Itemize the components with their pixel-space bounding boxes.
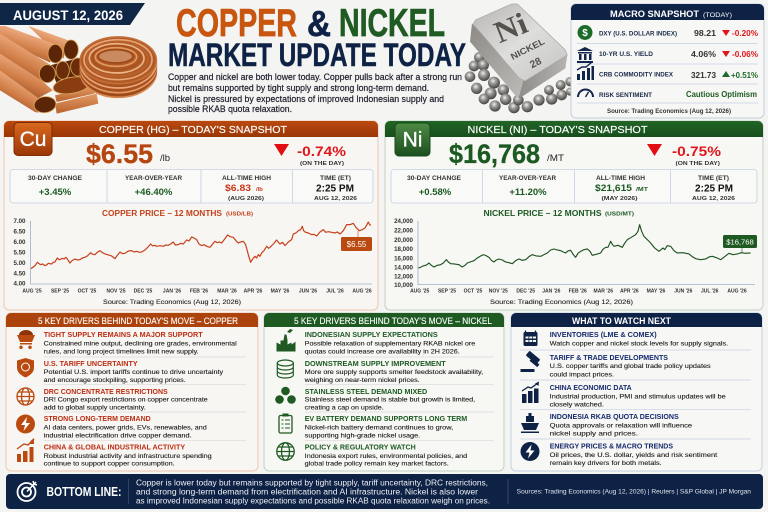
row: DXY: -0.20% bbox=[732, 29, 758, 38]
copper chart: 4.00 bbox=[13, 281, 26, 288]
driver: tariff uncertainty: and encourage stockpiling, supporting prices. bbox=[44, 377, 186, 384]
copper daily change bbox=[274, 143, 347, 167]
nickel chart: SEP '25 bbox=[438, 288, 456, 294]
driver: downstream supply: More ore supply supports smelter feedstock availability, bbox=[305, 369, 483, 376]
nickel chart: APR '26 bbox=[620, 288, 639, 294]
sources: Sources: Trading Economics (Aug 12, 2026) | Reuters | S&P Global | JP Morgan bbox=[517, 488, 752, 496]
driver: long-term demand: industrial electrification drive copper demand. bbox=[44, 432, 192, 440]
watch: RKAB quota bbox=[521, 412, 692, 438]
nickel chart: NOV '25 bbox=[489, 288, 508, 294]
copper chart: JUL '26 bbox=[326, 288, 344, 294]
copper chart: (USD/LB) bbox=[226, 212, 253, 218]
nickel chart: AUG '25 bbox=[410, 288, 430, 294]
nickel drivers header bbox=[264, 313, 504, 327]
title: NICKEL bbox=[339, 2, 445, 45]
watch: tariff bbox=[520, 351, 711, 378]
driver: Indonesian supply bbox=[276, 329, 476, 356]
nickel chart: 20,000 bbox=[394, 237, 414, 244]
nickel chart: JAN '26 bbox=[542, 288, 561, 294]
nickel price: /MT bbox=[547, 153, 564, 164]
copper stats: +3.45% bbox=[39, 187, 72, 198]
nickel badge bbox=[395, 123, 430, 156]
date banner: AUGUST 12, 2026 bbox=[13, 8, 123, 23]
driver: downstream supply: DOWNSTREAM SUPPLY IMPROVEMENT bbox=[305, 359, 446, 368]
nickel chart: 18,000 bbox=[394, 246, 414, 253]
row: 10-yr yield: 10-YR U.S. YIELD bbox=[599, 51, 654, 58]
driver: Indonesian supply: quotas could increase ore availability in 2H 2026. bbox=[305, 348, 460, 356]
driver: policy watch bbox=[277, 442, 468, 468]
row: DXY: DXY (U.S. DOLLAR INDEX) bbox=[599, 30, 677, 38]
watch: China data: Industrial production, PMI and stimulus updates will be bbox=[550, 394, 726, 400]
nickel daily change: (ON THE DAY) bbox=[676, 161, 720, 167]
illustration: nickel ingot and pellets: 28 bbox=[528, 56, 544, 71]
intro paragraph: Nickel is pressured by expectations of improved Indonesian supply and bbox=[168, 93, 444, 104]
intro paragraph bbox=[168, 71, 462, 114]
copper daily change: (ON THE DAY) bbox=[300, 161, 344, 167]
bottom line text: Copper is lower today but remains supported by tight supply, tariff uncertainty, DRC restrictions, bbox=[136, 478, 488, 488]
copper daily change: -0.74% bbox=[297, 143, 347, 159]
watch: tariff: could impact prices. bbox=[550, 372, 614, 378]
copper chart: JAN '26 bbox=[163, 288, 181, 294]
driver: Indonesian supply: Possible relaxation of supplementary RKAB nickel ore bbox=[305, 340, 476, 348]
nickel stats bbox=[391, 170, 757, 203]
nickel stats: TIME (ET) bbox=[698, 175, 729, 182]
nickel stats: /MT bbox=[636, 187, 649, 193]
copper stats: AUG 12, 2026 bbox=[314, 196, 357, 202]
illustration: nickel ingot and pellets bbox=[465, 4, 575, 113]
copper chart: APR '26 bbox=[244, 288, 263, 294]
copper stats: 2:25 PM bbox=[316, 184, 354, 194]
driver: China & global activity: continue to support copper consumption. bbox=[44, 460, 175, 468]
copper header: COPPER (HG) – TODAY'S SNAPSHOT bbox=[99, 125, 287, 136]
row: DXY bbox=[578, 25, 758, 40]
title bbox=[168, 2, 466, 73]
illustration: nickel ingot and pellets: NICKEL bbox=[509, 36, 547, 62]
driver: China & global activity bbox=[17, 438, 212, 468]
nickel stats: (MAY 2026) bbox=[602, 196, 638, 202]
watch: China data bbox=[522, 382, 726, 408]
driver: long-term demand: AI data centers, power grids, EVs, renewables, and bbox=[44, 424, 207, 432]
nickel badge: Ni bbox=[403, 128, 422, 152]
driver: EV battery bbox=[279, 414, 467, 440]
nickel chart: 24,000 bbox=[394, 218, 414, 225]
nickel chart: FEB '26 bbox=[569, 288, 587, 294]
bottom line text: as improved Indonesian supply expectations and possible RKAB quota relaxation weigh on prices. bbox=[136, 496, 490, 506]
bottom line label: BOTTOM LINE: bbox=[46, 485, 122, 499]
copper stats: ALL-TIME HIGH bbox=[222, 175, 271, 182]
copper chart: COPPER PRICE – 12 MONTHS bbox=[102, 208, 222, 218]
copper chart: JUN '26 bbox=[299, 288, 317, 294]
copper chart: OCT '25 bbox=[78, 288, 97, 294]
nickel chart bbox=[394, 208, 757, 294]
row: CRB: +0.51% bbox=[731, 71, 758, 80]
copper chart: AUG '25 bbox=[22, 288, 42, 294]
copper chart: FEB '26 bbox=[190, 288, 208, 294]
copper stats: +46.40% bbox=[135, 187, 173, 198]
driver: downstream supply: weighing on near-term nickel prices. bbox=[304, 377, 420, 384]
copper price tag bbox=[341, 231, 372, 251]
nickel chart: NICKEL PRICE – 12 MONTHS bbox=[484, 208, 602, 218]
intro paragraph: but remains supported by tight supply and strong long-term demand. bbox=[168, 82, 429, 93]
nickel stats: $21,615 bbox=[595, 183, 633, 194]
intro paragraph: possible RKAB quota relaxation. bbox=[168, 103, 292, 114]
nickel chart: OCT '25 bbox=[464, 288, 483, 294]
nickel chart: 10,000 bbox=[394, 282, 414, 289]
copper source: Source: Trading Economics (Aug 12, 2026) bbox=[103, 299, 241, 306]
illustration: nickel ingot and pellets: Ni bbox=[489, 6, 533, 50]
row: DXY: 98.21 bbox=[694, 28, 716, 38]
nickel price tag bbox=[723, 235, 757, 253]
watch: inventories bbox=[524, 330, 728, 348]
driver: stainless steel bbox=[275, 387, 475, 412]
watch: RKAB quota: INDONESIA RKAB QUOTA DECISIONS bbox=[550, 412, 679, 421]
row: CRB: CRB COMMODITY INDEX bbox=[599, 72, 674, 78]
copper price: /lb bbox=[160, 153, 170, 164]
copper chart: MAR '26 bbox=[217, 288, 237, 294]
macro header: (TODAY) bbox=[703, 12, 732, 19]
copper badge: Cu bbox=[20, 128, 46, 151]
row: CRB bbox=[577, 62, 758, 80]
icon: target bbox=[18, 481, 37, 501]
date banner bbox=[0, 3, 145, 25]
copper price line bbox=[31, 222, 371, 269]
driver: DRC restrictions: add to global supply uncertainty. bbox=[44, 404, 146, 412]
driver: DRC restrictions bbox=[17, 387, 208, 412]
watch: tariff: U.S. copper tariffs and global trade policy updates bbox=[550, 363, 711, 370]
driver: DRC restrictions: DRC CONCENTRATE RESTRICTIONS bbox=[44, 387, 168, 396]
nickel chart: 14,000 bbox=[394, 264, 414, 271]
nickel price tag: $16,768 bbox=[726, 238, 754, 246]
nickel chart: AUG '26 bbox=[727, 288, 747, 294]
copper chart: 5.50 bbox=[13, 250, 26, 257]
row: DXY: $ bbox=[582, 28, 588, 39]
driver: tight supply: rules, and long project timelines limit new supply. bbox=[44, 348, 199, 356]
nickel chart: (USD/MT) bbox=[605, 212, 634, 218]
copper chart: 4.50 bbox=[13, 271, 26, 278]
nickel stats: 30-DAY CHANGE bbox=[407, 175, 462, 182]
copper stats bbox=[10, 170, 373, 203]
driver: tight supply: TIGHT SUPPLY REMAINS A MAJOR SUPPORT bbox=[44, 330, 203, 339]
driver: downstream supply bbox=[277, 359, 483, 384]
watch: energy prices: Oil prices, the U.S. dollar, yields and risk sentiment bbox=[550, 452, 717, 459]
copper chart: NOV '25 bbox=[107, 288, 126, 294]
panel: macro snapshot bbox=[571, 4, 764, 118]
macro header bbox=[571, 4, 764, 20]
driver: Indonesian supply: INDONESIAN SUPPLY EXPECTATIONS bbox=[305, 330, 438, 339]
driver: DRC restrictions: DR! Congo export restrictions on copper concentrate bbox=[44, 396, 208, 404]
nickel price line bbox=[418, 225, 751, 268]
copper chart: 7.00 bbox=[13, 218, 26, 225]
row: CRB: 321.73 bbox=[691, 70, 716, 80]
copper drivers header bbox=[6, 313, 258, 327]
copper price: $6.55 bbox=[86, 139, 153, 169]
bottom line bar bbox=[6, 474, 763, 509]
watch: energy prices: remain key drivers for both metals. bbox=[550, 460, 662, 467]
driver: long-term demand bbox=[16, 414, 207, 440]
watch: China data: CHINA ECONOMIC DATA bbox=[550, 383, 632, 392]
row: risk sentiment bbox=[578, 90, 757, 99]
macro header: MACRO SNAPSHOT bbox=[610, 9, 699, 20]
driver: stainless steel: STAINLESS STEEL DEMAND MIXED bbox=[305, 387, 428, 396]
nickel chart: 12,000 bbox=[394, 274, 414, 280]
panel: nickel drivers bbox=[264, 313, 504, 471]
nickel chart: MAY '26 bbox=[647, 288, 666, 294]
nickel stats: +0.58% bbox=[419, 187, 452, 198]
driver: tight supply: Constrained mine output, declining ore grades, environmental bbox=[44, 340, 237, 348]
copper stats: TIME (ET) bbox=[320, 175, 351, 182]
copper price tag: $6.55 bbox=[347, 240, 367, 249]
bottom line text: and strong long-term demand from electrification and AI infrastructure. Nickel is also lower bbox=[136, 488, 478, 496]
copper badge bbox=[14, 122, 52, 156]
copper chart: MAY '26 bbox=[271, 288, 290, 294]
copper stats: (AUG 2026) bbox=[228, 196, 264, 202]
panel: nickel snapshot bbox=[385, 121, 763, 310]
nickel drivers header: 5 KEY DRIVERS BEHIND TODAY'S MOVE – NICKEL bbox=[294, 316, 492, 326]
title: MARKET UPDATE TODAY bbox=[168, 37, 466, 73]
row: 10-yr yield: 4.06% bbox=[691, 49, 717, 59]
panel: copper snapshot bbox=[4, 121, 378, 310]
illustration: copper pipes and coil bbox=[0, 26, 157, 114]
bottom line text bbox=[136, 478, 490, 506]
row: 10-yr yield: -0.06% bbox=[732, 50, 758, 59]
nickel chart: JUN '26 bbox=[674, 288, 693, 294]
copper drivers header: 5 KEY DRIVERS BEHIND TODAY'S MOVE – COPPER bbox=[38, 316, 238, 326]
driver: policy watch: Indonesia export rules, environmental policies, and bbox=[305, 453, 468, 460]
nickel daily change bbox=[647, 143, 722, 167]
nickel stats: YEAR-OVER-YEAR bbox=[499, 175, 556, 182]
title: & bbox=[307, 3, 331, 44]
nickel chart: 22,000 bbox=[394, 228, 414, 235]
driver: tight supply bbox=[17, 330, 237, 356]
watch header: WHAT TO WATCH NEXT bbox=[572, 316, 671, 326]
macro source: Source: Trading Economics (Aug 12, 2026) bbox=[607, 108, 731, 115]
copper stats: $6.83 bbox=[225, 183, 251, 194]
watch: energy prices: ENERGY PRICES & MACRO TRENDS bbox=[550, 442, 673, 450]
driver: tariff uncertainty: Potential U.S. import tariffs continue to drive uncertainty bbox=[44, 369, 224, 376]
driver: tariff uncertainty: U.S. TARIFF UNCERTAINTY bbox=[44, 359, 138, 368]
nickel price: $16,768 bbox=[449, 139, 540, 169]
copper stats: YEAR-OVER-YEAR bbox=[125, 175, 182, 182]
copper chart: SEP '25 bbox=[51, 288, 69, 294]
nickel chart: DEC '25 bbox=[516, 288, 535, 294]
driver: EV battery: supporting high-grade nickel usage. bbox=[305, 432, 420, 440]
nickel source: Source: Trading Economics (Aug 12, 2026) bbox=[490, 299, 633, 306]
title: COPPER bbox=[176, 2, 297, 45]
copper chart bbox=[13, 208, 372, 294]
driver: long-term demand: STRONG LONG-TERM DEMAND bbox=[44, 414, 151, 423]
copper chart: 6.50 bbox=[13, 229, 26, 236]
row: 10-yr yield bbox=[577, 47, 758, 63]
copper header bbox=[4, 121, 378, 137]
driver: policy watch: global trade policy remain key market factors. bbox=[305, 460, 449, 468]
nickel header: NICKEL (NI) – TODAY'S SNAPSHOT bbox=[468, 125, 648, 136]
watch: RKAB quota: Quota approvals or relaxation will influence bbox=[550, 422, 692, 430]
panel: what to watch next bbox=[511, 313, 762, 471]
watch: RKAB quota: nickel supply and prices. bbox=[550, 430, 638, 438]
copper chart: 6.00 bbox=[13, 239, 26, 246]
copper chart: DEC '25 bbox=[134, 288, 153, 294]
driver: China & global activity: Robust industrial activity and infrastructure spending bbox=[44, 453, 212, 460]
watch header bbox=[511, 313, 762, 327]
copper chart: AUG '26 bbox=[352, 288, 372, 294]
row: risk sentiment: Cautious Optimism bbox=[686, 90, 757, 99]
nickel stats: 2:25 PM bbox=[695, 184, 733, 194]
panel: copper drivers bbox=[6, 313, 258, 471]
copper stats: 30-DAY CHANGE bbox=[28, 175, 83, 182]
driver: stainless steel: Stainless steel demand is stable but growth is limited, bbox=[305, 396, 475, 404]
nickel daily change: -0.75% bbox=[672, 143, 722, 159]
intro paragraph: Copper and nickel are both lower today. Copper pulls back after a strong run bbox=[168, 71, 462, 82]
driver: EV battery: Nickel-rich battery demand continues to grow, bbox=[305, 424, 453, 432]
nickel chart: 16,000 bbox=[394, 255, 414, 262]
nickel stats: AUG 12, 2026 bbox=[692, 196, 735, 202]
watch: China data: closely watched. bbox=[550, 402, 604, 408]
nickel stats: ALL-TIME HIGH bbox=[596, 175, 645, 182]
driver: EV battery: EV BATTERY DEMAND SUPPORTS LONG TERM bbox=[305, 414, 467, 423]
copper stats: /lb bbox=[256, 187, 263, 193]
driver: stainless steel: creating a cap on upside. bbox=[305, 404, 384, 412]
watch: energy prices bbox=[520, 442, 717, 467]
nickel chart: MAR '26 bbox=[594, 288, 613, 294]
watch: tariff: TARIFF & TRADE DEVELOPMENTS bbox=[550, 353, 668, 362]
row: risk sentiment: RISK SENTIMENT bbox=[599, 92, 652, 99]
nickel stats: +11.20% bbox=[509, 187, 547, 198]
copper chart: 5.00 bbox=[13, 260, 26, 267]
watch: inventories: INVENTORIES (LME & COMEX) bbox=[550, 330, 657, 339]
driver: tariff uncertainty bbox=[17, 358, 224, 384]
nickel chart: JUL '26 bbox=[701, 288, 719, 294]
watch: inventories: Watch copper and nickel stock levels for supply signals. bbox=[550, 340, 728, 348]
driver: policy watch: POLICY & REGULATORY WATCH bbox=[305, 442, 416, 452]
driver: China & global activity: CHINA & GLOBAL INDUSTRIAL ACTIVITY bbox=[44, 442, 185, 452]
nickel header bbox=[385, 121, 763, 137]
